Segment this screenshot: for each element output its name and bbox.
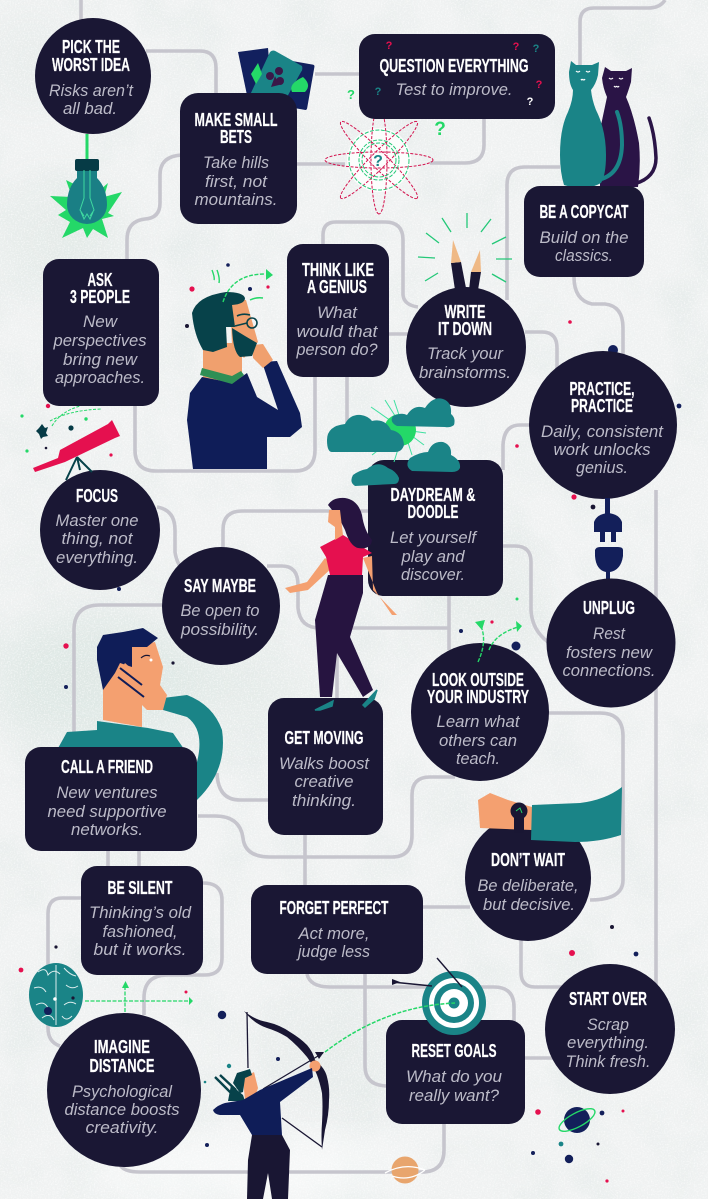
heading: UNPLUG bbox=[583, 598, 635, 618]
panel: unplug bbox=[546, 578, 676, 708]
panel: think like a genius bbox=[287, 244, 389, 377]
heading bbox=[52, 37, 130, 75]
text: mountains. bbox=[194, 190, 278, 209]
text: thinking. bbox=[292, 791, 356, 810]
text: Scrap bbox=[587, 1015, 629, 1034]
text: judge less bbox=[296, 942, 370, 961]
icon: playing cards bbox=[238, 48, 315, 110]
text: Be open to bbox=[180, 601, 260, 620]
text: everything. bbox=[56, 548, 138, 567]
heading: GET MOVING bbox=[284, 728, 364, 748]
text: work unlocks bbox=[554, 440, 651, 459]
panel: make small bets bbox=[180, 93, 297, 224]
text: fashioned, bbox=[102, 922, 178, 941]
heading bbox=[70, 270, 130, 307]
heading: DAYDREAM & bbox=[390, 485, 476, 505]
panel: say maybe bbox=[162, 547, 280, 665]
text: creative bbox=[294, 772, 354, 791]
text bbox=[436, 712, 521, 768]
heading: THINK LIKE bbox=[302, 260, 374, 280]
text: play and bbox=[401, 547, 465, 566]
icon: pencils with rays bbox=[418, 213, 512, 290]
text: New bbox=[83, 312, 119, 331]
text bbox=[194, 153, 278, 209]
text: creativity. bbox=[86, 1118, 158, 1137]
panel: don't wait bbox=[465, 815, 591, 941]
text bbox=[566, 1015, 650, 1071]
text: New ventures bbox=[56, 783, 158, 802]
text: Daily, consistent bbox=[541, 422, 664, 441]
heading bbox=[390, 485, 476, 522]
icon: light bulb bbox=[50, 134, 122, 238]
text: would that bbox=[296, 322, 379, 341]
text: all bad. bbox=[63, 99, 117, 118]
text: need supportive bbox=[48, 802, 166, 821]
illustration: thinking man bbox=[187, 269, 302, 469]
text: What do you bbox=[406, 1067, 503, 1086]
panel: forget perfect bbox=[251, 885, 423, 974]
text: Psychological bbox=[72, 1082, 173, 1101]
text bbox=[53, 312, 147, 387]
heading: YOUR INDUSTRY bbox=[427, 687, 529, 707]
scattered dots bbox=[19, 263, 681, 1183]
text: everything. bbox=[567, 1033, 649, 1052]
text: Take hills bbox=[203, 153, 269, 172]
text bbox=[64, 1082, 180, 1137]
panel: reset goals bbox=[386, 1020, 525, 1124]
panel: be a copycat bbox=[524, 186, 644, 277]
heading: A GENIUS bbox=[307, 277, 367, 297]
icon: target with arrows bbox=[392, 958, 486, 1035]
text: distance boosts bbox=[64, 1100, 180, 1119]
heading: CALL A FRIEND bbox=[61, 757, 153, 777]
text bbox=[390, 528, 478, 584]
heading: PICK THE bbox=[62, 37, 120, 57]
heading: START OVER bbox=[569, 989, 647, 1009]
text: Be deliberate, bbox=[478, 876, 578, 895]
heading: ASK bbox=[88, 270, 112, 290]
text: genius. bbox=[576, 458, 628, 477]
text: Test to improve. bbox=[396, 80, 512, 99]
text: Master one bbox=[56, 511, 138, 530]
question marks: ? bbox=[536, 79, 543, 91]
icon: blue planet with ring bbox=[556, 1104, 598, 1136]
text: What bbox=[317, 303, 358, 322]
icon: atom of questions: ? bbox=[373, 153, 383, 170]
text bbox=[540, 228, 628, 265]
text: networks. bbox=[71, 820, 143, 839]
text: thing, not bbox=[62, 529, 134, 548]
question marks: ? bbox=[386, 40, 393, 52]
text: Risks aren’t bbox=[49, 81, 134, 100]
text bbox=[48, 783, 166, 839]
text: fosters new bbox=[566, 643, 654, 662]
text bbox=[89, 903, 192, 959]
panel: question everything bbox=[347, 34, 555, 140]
heading: FOCUS bbox=[76, 486, 118, 506]
heading bbox=[427, 670, 529, 707]
text: approaches. bbox=[55, 368, 145, 387]
text: Learn what bbox=[436, 712, 521, 731]
text: possibility. bbox=[180, 620, 259, 639]
text bbox=[56, 511, 138, 567]
panel: practice, practice bbox=[529, 351, 677, 499]
heading bbox=[194, 110, 278, 147]
text: perspectives bbox=[53, 331, 147, 350]
heading: SAY MAYBE bbox=[184, 576, 256, 596]
panel: pick the worst idea bbox=[35, 18, 151, 134]
question marks: ? bbox=[527, 96, 534, 108]
question marks: ? bbox=[375, 86, 382, 98]
heading: DOODLE bbox=[408, 502, 458, 522]
heading: QUESTION EVERYTHING bbox=[380, 56, 528, 76]
panel: be silent bbox=[81, 866, 203, 975]
panel: ask 3 people bbox=[43, 259, 159, 406]
icon: telescope bbox=[20, 404, 120, 480]
heading: 3 PEOPLE bbox=[70, 287, 130, 307]
heading: BETS bbox=[220, 127, 252, 147]
panel: look outside your industry bbox=[411, 620, 549, 781]
question marks: ? bbox=[533, 43, 540, 55]
icon: plug and socket bbox=[594, 498, 623, 580]
text: others can bbox=[439, 731, 517, 750]
text: bring new bbox=[63, 350, 139, 369]
text: connections. bbox=[562, 661, 656, 680]
text: really want? bbox=[409, 1086, 500, 1105]
text bbox=[49, 81, 134, 118]
icon: clouds and sun bbox=[327, 398, 460, 486]
text: teach. bbox=[456, 749, 500, 768]
text: Track your bbox=[427, 344, 504, 363]
panel: imagine distance bbox=[47, 1013, 201, 1167]
panel: daydream and doodle bbox=[368, 460, 503, 596]
heading: RESET GOALS bbox=[412, 1041, 496, 1061]
icon: orange planet bbox=[385, 1156, 425, 1184]
illustration: walking woman bbox=[285, 498, 397, 710]
question marks: ? bbox=[513, 41, 520, 53]
illustration: arm with watch bbox=[478, 787, 622, 842]
question marks bbox=[347, 40, 543, 140]
heading: WRITE bbox=[444, 302, 486, 322]
panel: call a friend bbox=[25, 747, 197, 851]
question marks: ? bbox=[434, 119, 446, 140]
heading: IT DOWN bbox=[438, 319, 492, 339]
text bbox=[478, 876, 578, 914]
panel: write it down bbox=[406, 287, 526, 407]
text bbox=[296, 303, 379, 359]
heading: DISTANCE bbox=[90, 1056, 154, 1076]
text bbox=[296, 924, 370, 961]
text: Thinking’s old bbox=[89, 903, 192, 922]
text: classics. bbox=[555, 246, 613, 265]
text bbox=[279, 754, 370, 810]
heading bbox=[90, 1037, 154, 1076]
heading: IMAGINE bbox=[94, 1037, 150, 1057]
text: Think fresh. bbox=[566, 1052, 650, 1071]
text: Build on the bbox=[540, 228, 628, 247]
text: person do? bbox=[296, 340, 378, 359]
text bbox=[419, 344, 511, 382]
question marks: ? bbox=[347, 87, 355, 102]
icon: atom of questions bbox=[325, 106, 433, 214]
panel: get moving bbox=[268, 698, 383, 835]
text bbox=[406, 1067, 503, 1105]
heading: BE A COPYCAT bbox=[540, 202, 628, 222]
text bbox=[180, 601, 260, 639]
text: but it works. bbox=[94, 940, 186, 959]
text bbox=[562, 624, 656, 680]
arrows: distance axes bbox=[85, 981, 193, 1012]
text bbox=[541, 422, 664, 477]
heading bbox=[570, 379, 634, 416]
text: first, not bbox=[205, 172, 268, 191]
heading: PRACTICE, bbox=[570, 379, 634, 399]
text: but decisive. bbox=[483, 895, 575, 914]
arrows bbox=[475, 620, 522, 662]
panel: focus bbox=[40, 470, 160, 590]
text: Let yourself bbox=[390, 528, 478, 547]
heading: PRACTICE bbox=[571, 396, 633, 416]
text: discover. bbox=[401, 565, 465, 584]
illustration: archer bbox=[213, 1003, 455, 1199]
heading: WORST IDEA bbox=[52, 55, 130, 75]
text: Act more, bbox=[298, 924, 370, 943]
illustration: man calling bbox=[57, 628, 223, 800]
heading bbox=[438, 302, 492, 339]
text: Walks boost bbox=[279, 754, 370, 773]
text: Rest bbox=[593, 624, 626, 643]
heading: LOOK OUTSIDE bbox=[432, 670, 524, 690]
heading: MAKE SMALL bbox=[194, 110, 278, 130]
heading bbox=[302, 260, 374, 297]
heading: BE SILENT bbox=[108, 878, 172, 898]
heading: FORGET PERFECT bbox=[280, 898, 388, 918]
text: brainstorms. bbox=[419, 363, 511, 382]
icon: brain bbox=[29, 963, 83, 1027]
panel: start over bbox=[545, 964, 675, 1094]
heading: DON’T WAIT bbox=[491, 850, 565, 870]
icon: two cats bbox=[560, 61, 656, 188]
